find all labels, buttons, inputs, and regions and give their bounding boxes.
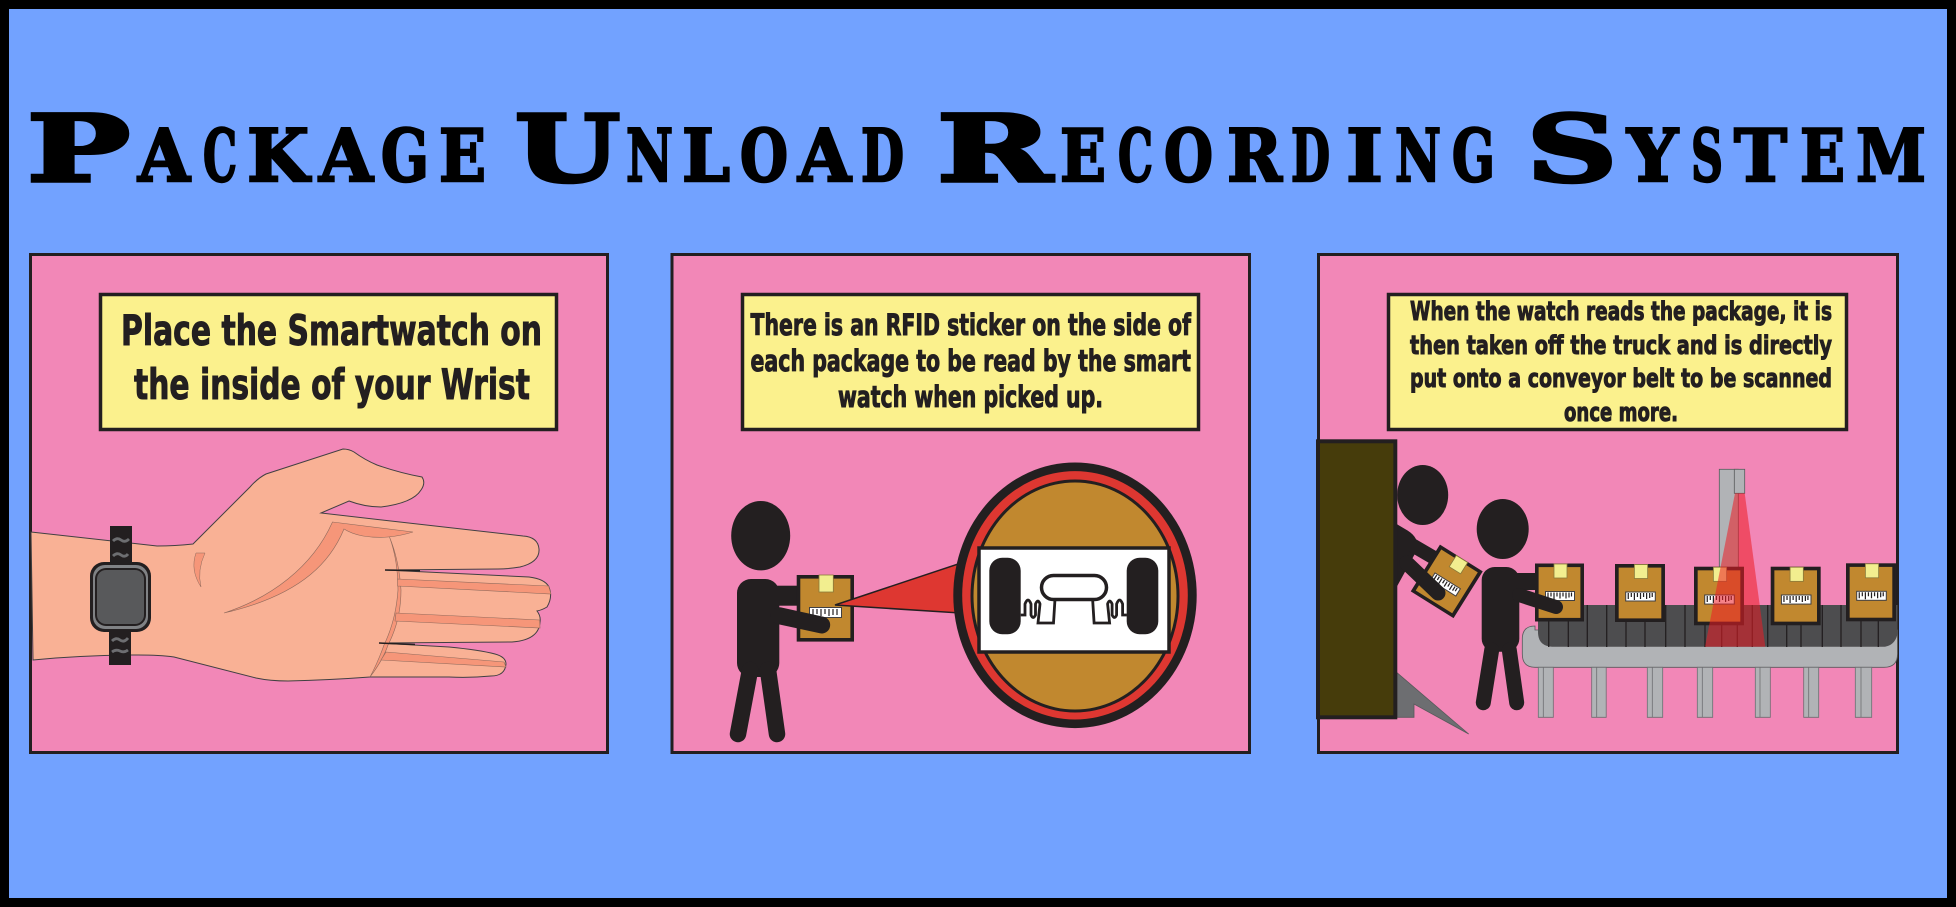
title: A xyxy=(137,113,191,198)
instruction box 3: once more. xyxy=(1564,398,1678,428)
instruction box 2: each package to be read by the smart xyxy=(750,344,1191,378)
panel: RFID sticker xyxy=(672,254,1250,752)
figure: worker at conveyor xyxy=(1477,499,1538,703)
RFID inlay xyxy=(979,548,1169,652)
instruction box 2: There is an RFID sticker on the side of xyxy=(750,308,1191,342)
figure: worker in truck xyxy=(1390,465,1448,590)
title: P xyxy=(27,95,130,203)
title: L xyxy=(682,113,730,198)
instruction box 2 xyxy=(742,294,1198,430)
title: G xyxy=(381,113,429,198)
title: U xyxy=(515,95,620,203)
title: A xyxy=(797,113,852,198)
instruction box 1: the inside of your Wrist xyxy=(134,360,530,409)
worker arm over package xyxy=(1519,595,1556,607)
title: O xyxy=(740,113,788,198)
title: D xyxy=(861,113,904,198)
scanner pole xyxy=(1719,469,1745,569)
title: E xyxy=(1800,113,1845,198)
title: N xyxy=(1395,113,1441,198)
title: N xyxy=(626,113,673,198)
red scan beam xyxy=(1705,493,1765,647)
figure: person holding package xyxy=(731,501,852,734)
package: tilted xyxy=(1413,546,1481,616)
title: Y xyxy=(1626,113,1680,198)
instruction box 3: then taken off the truck and is directly xyxy=(1410,331,1832,361)
icon: smartwatch xyxy=(90,526,151,665)
title: C xyxy=(203,113,237,198)
package on conveyor 3 xyxy=(1696,567,1742,623)
title: K xyxy=(247,113,311,198)
title: T xyxy=(1734,113,1787,198)
panel: truck unloading and conveyor xyxy=(1318,254,1898,752)
package on conveyor 2 xyxy=(1617,564,1663,620)
worker arm over tilted package xyxy=(1407,563,1438,593)
title: R xyxy=(937,95,1053,203)
package on conveyor 1 xyxy=(1537,564,1582,620)
instruction box 1 xyxy=(100,294,556,430)
instruction box 2: watch when picked up. xyxy=(838,380,1103,414)
title: O xyxy=(1164,113,1213,198)
title: R xyxy=(1227,113,1283,198)
title: E xyxy=(1060,113,1106,198)
title: I xyxy=(1346,113,1383,198)
conveyor belt xyxy=(1522,605,1898,717)
title: S xyxy=(1691,113,1723,198)
truck ramp xyxy=(1397,673,1469,734)
icon: hand xyxy=(31,449,551,681)
truck door xyxy=(1318,441,1395,717)
title: G xyxy=(1452,113,1495,198)
title: M xyxy=(1856,113,1926,198)
instruction box 1: Place the Smartwatch on xyxy=(121,306,542,355)
title: D xyxy=(1291,113,1330,198)
title: A xyxy=(318,113,374,198)
package on conveyor 5 xyxy=(1848,564,1894,620)
magnified RFID sticker circle xyxy=(953,462,1197,728)
title: E xyxy=(439,113,486,198)
magnify beam xyxy=(835,564,958,613)
package on conveyor 4 xyxy=(1773,567,1819,623)
title: S xyxy=(1527,95,1617,203)
instruction box 3 xyxy=(1388,294,1846,430)
panel: place the smartwatch xyxy=(30,254,608,752)
title: C xyxy=(1118,113,1153,198)
